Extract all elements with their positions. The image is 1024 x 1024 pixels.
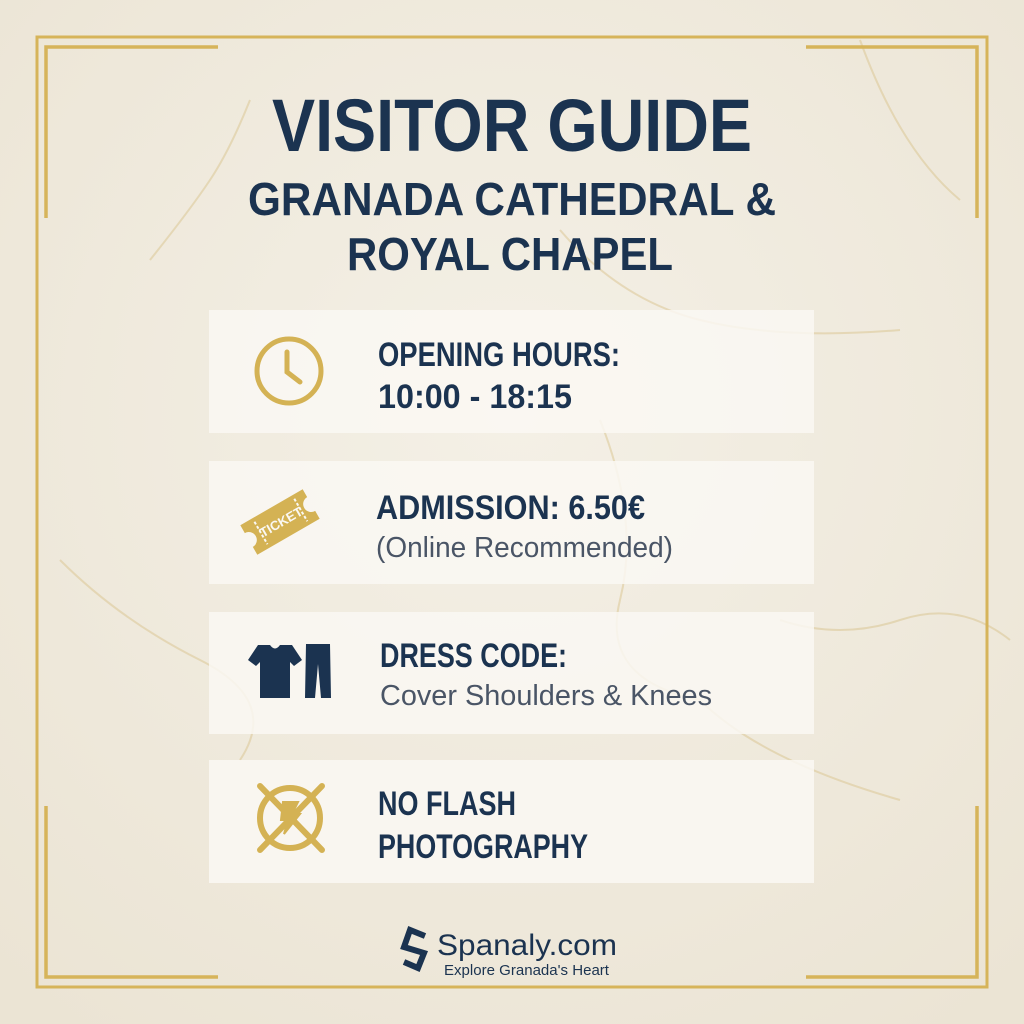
panel: opening hours — [209, 310, 814, 433]
icon: ticket — [240, 489, 320, 555]
panel: dress code — [209, 612, 814, 734]
panel: opening hours: OPENING HOURS: — [378, 336, 620, 374]
logo: Spanaly.com — [437, 929, 617, 962]
subtitle: ROYAL CHAPEL — [347, 228, 673, 280]
panel: admission: ADMISSION: 6.50€ — [376, 489, 645, 527]
panel: no flash: NO FLASH — [378, 785, 516, 823]
panel: admission — [209, 461, 814, 584]
panel: opening hours: 10:00 - 18:15 — [378, 378, 572, 416]
panel: dress code: Cover Shoulders & Knees — [380, 680, 712, 712]
subtitle — [248, 173, 776, 280]
subtitle: GRANADA CATHEDRAL & — [248, 173, 776, 225]
panel: admission: (Online Recommended) — [376, 532, 673, 564]
panel: no flash — [209, 760, 814, 883]
icon: ticket: TICKET — [257, 504, 305, 540]
logo: Explore Granada's Heart — [444, 962, 610, 979]
panel: dress code: DRESS CODE: — [380, 637, 567, 675]
icon: clock — [257, 339, 321, 403]
panel: no flash: PHOTOGRAPHY — [378, 828, 588, 866]
icon: clothes — [248, 644, 331, 698]
title: VISITOR GUIDE — [272, 84, 752, 167]
icon: no flash — [260, 786, 322, 850]
logo — [404, 929, 617, 979]
